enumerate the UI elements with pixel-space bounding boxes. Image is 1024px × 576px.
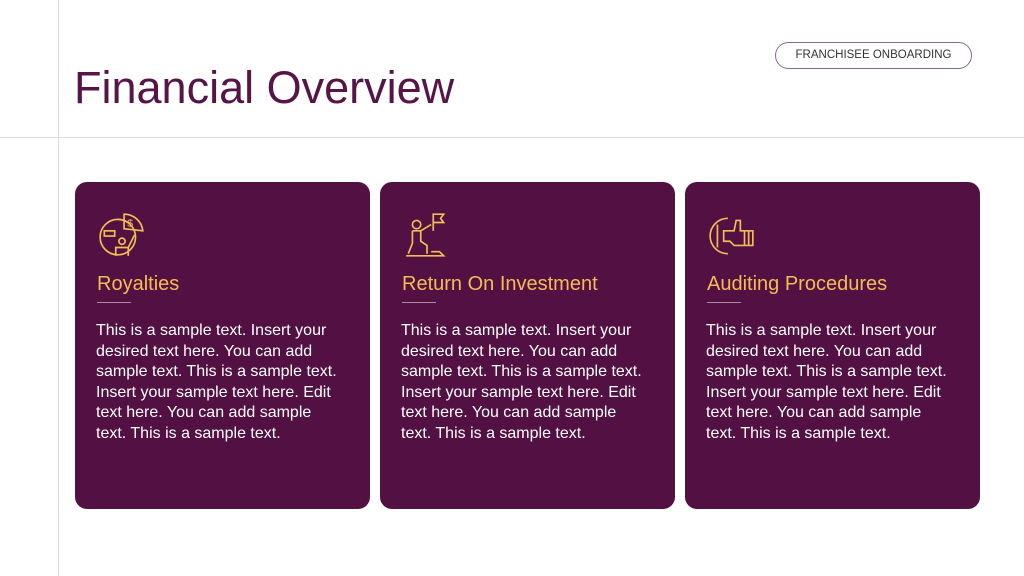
body text: sample text. This is a sample text. — [706, 363, 947, 380]
body text: desired text here. You can add — [401, 343, 617, 360]
body text: This is a sample text. Insert your — [706, 322, 936, 339]
body text — [96, 322, 337, 442]
tag pill — [775, 42, 972, 69]
icon: hand thumbs up — [709, 218, 754, 255]
body text: Insert your sample text here. Edit — [401, 384, 636, 401]
body text: This is a sample text. Insert your — [401, 322, 631, 339]
body text: sample text. This is a sample text. — [96, 363, 337, 380]
body text: text here. You can add sample — [96, 404, 311, 421]
panel: auditing procedures — [685, 182, 980, 509]
heading: Royalties — [97, 273, 179, 295]
body text: text. This is a sample text. — [401, 425, 586, 442]
body text: text. This is a sample text. — [706, 425, 891, 442]
heading: Auditing Procedures — [707, 273, 887, 295]
body text: desired text here. You can add — [96, 343, 312, 360]
body text — [401, 322, 642, 442]
body text: text. This is a sample text. — [96, 425, 281, 442]
body text: desired text here. You can add — [706, 343, 922, 360]
body text: text here. You can add sample — [401, 404, 616, 421]
body text: Insert your sample text here. Edit — [706, 384, 941, 401]
body text: text here. You can add sample — [706, 404, 921, 421]
body text: Insert your sample text here. Edit — [96, 384, 331, 401]
tag pill: FRANCHISEE ONBOARDING — [796, 49, 951, 61]
title: Financial Overview — [74, 62, 454, 113]
body text: sample text. This is a sample text. — [401, 363, 642, 380]
icon: pie chart with dollar — [99, 213, 144, 256]
heading: Return On Investment — [402, 273, 598, 295]
body text: This is a sample text. Insert your — [96, 322, 326, 339]
body text — [706, 322, 947, 442]
icon: pie chart with dollar: $ — [127, 219, 133, 230]
panel: royalties — [75, 182, 370, 509]
icon: person with flag — [406, 213, 446, 257]
panel: return on investment — [380, 182, 675, 509]
